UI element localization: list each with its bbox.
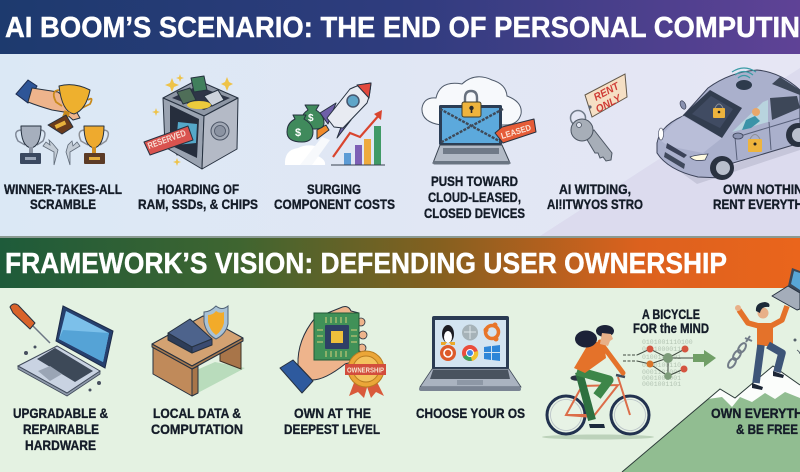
icon: broken chain	[726, 336, 752, 369]
label: garbled AI line	[547, 181, 643, 212]
label: garbled AI line: AI!ITWYOS STRO	[547, 196, 643, 212]
label: a bicycle for the mind	[633, 306, 709, 336]
panel: Framework's vision	[0, 236, 800, 472]
icon: key with rent only tag: ONLY	[594, 92, 624, 116]
label: local data and computation	[151, 405, 243, 437]
label: local data and computation: COMPUTATION	[151, 421, 243, 437]
icon: rocket, money bags and rising bars: $	[295, 127, 301, 139]
label: push toward cloud-leased, closed devices: PUSH TOWARD	[431, 173, 518, 189]
illustration: mountain peak	[622, 366, 800, 472]
icon: laptop with OS logos	[419, 316, 521, 391]
label: push toward cloud-leased, closed devices: CLOSED DEVICES	[424, 205, 525, 221]
label: surging component costs: SURGING	[307, 181, 361, 197]
figure: person on peak raising a laptop	[735, 268, 800, 390]
icon: hand holding chip with ownership badge	[280, 307, 386, 398]
diagram: binary neural network with arrow: 0100100101	[642, 354, 681, 361]
label: upgradable and repairable hardware: REPAIRABLE	[23, 421, 99, 437]
label: own at the deepest level: DEEPEST LEVEL	[284, 421, 380, 437]
label: hoarding of RAM, SSDs and chips: HOARDING OF	[157, 181, 239, 197]
label: winner-takes-all scramble: SCRAMBLE	[30, 196, 96, 212]
label: winner-takes-all scramble	[4, 181, 122, 212]
icon: safe with reserved tag	[144, 74, 238, 169]
icon: chained laptop in cloud with lock: LEASED	[500, 122, 532, 141]
label: push toward cloud-leased, closed devices	[424, 173, 525, 221]
heading band: Framework's vision: FRAMEWORK’S VISION: DEFENDING USER OWNERSHIP	[5, 248, 727, 280]
icon: locked self-driving car	[657, 68, 800, 184]
icon: trophies and reaching hand	[16, 80, 108, 165]
label: upgradable and repairable hardware	[13, 405, 108, 453]
label: own at the deepest level: OWN AT THE	[294, 405, 371, 421]
diagram: binary neural network with arrow: 0001001101	[642, 381, 681, 388]
icon: chained laptop in cloud with lock	[422, 77, 536, 164]
icon: rocket, money bags and rising bars: $	[308, 113, 314, 124]
label: local data and computation: LOCAL DATA &	[153, 405, 241, 421]
icon: rocket, money bags and rising bars	[285, 83, 385, 165]
icon: desk with computer and shield	[152, 306, 245, 396]
label: surging component costs: COMPONENT COSTS	[274, 196, 395, 212]
panel: AI boom scenario	[0, 0, 800, 236]
heading band: Framework's vision	[0, 238, 800, 288]
diagram: binary neural network with arrow: 0001101001	[642, 369, 681, 376]
diagram: binary neural network with arrow: 0101001110100	[642, 339, 693, 346]
label: a bicycle for the mind: A BICYCLE	[642, 306, 700, 322]
label: own at the deepest level	[284, 405, 380, 437]
diagram: binary neural network with arrow	[623, 339, 716, 388]
label: upgradable and repairable hardware: UPGRADABLE &	[13, 405, 108, 421]
label: own everything and be free	[711, 405, 800, 437]
label: hoarding of RAM, SSDs and chips: RAM, SSDs, & CHIPS	[138, 196, 258, 212]
heading band: AI boom scenario	[0, 0, 800, 54]
label: choose your OS: CHOOSE YOUR OS	[416, 405, 525, 421]
icon: safe with reserved tag: RESERVED	[146, 128, 188, 151]
label: upgradable and repairable hardware: HARDWARE	[25, 437, 96, 453]
label: push toward cloud-leased, closed devices: CLOUD-LEASED,	[428, 189, 521, 205]
diagram: binary neural network with arrow: 0110100110	[642, 362, 681, 369]
icon: hand holding chip with ownership badge: OWNERSHIP	[347, 368, 384, 374]
label: hoarding of RAM, SSDs and chips	[138, 181, 258, 212]
icon: upgradable laptop and screwdriver	[10, 304, 113, 396]
icon: woman riding a bicycle	[542, 325, 654, 440]
label: surging component costs	[274, 181, 395, 212]
label: own nothing, rent everything	[713, 181, 800, 212]
icon: key with rent only tag	[570, 74, 627, 161]
label: a bicycle for the mind: FOR the MIND	[633, 320, 709, 336]
diagram: binary neural network with arrow: 0101000011	[642, 346, 681, 353]
icon: key with rent only tag: RENT	[592, 80, 623, 104]
diagram: binary neural network with arrow: 0001001001	[642, 375, 681, 382]
label: garbled AI line: AI WITDING,	[559, 181, 631, 197]
label: winner-takes-all scramble: WINNER-TAKES-ALL	[4, 181, 122, 197]
